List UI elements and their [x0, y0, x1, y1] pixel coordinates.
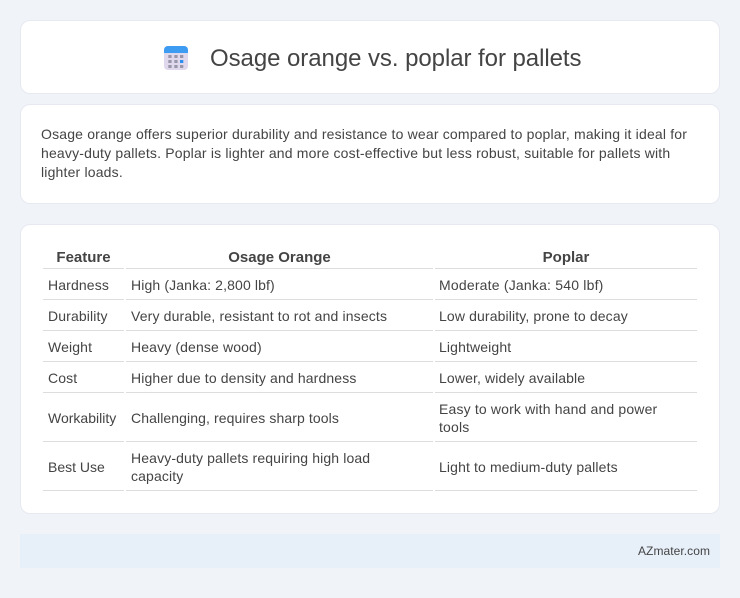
row: best use: capacity [131, 468, 183, 484]
row: cost: Higher due to density and hardness [131, 370, 356, 386]
table header [56, 249, 590, 266]
row: cost: Cost [48, 370, 77, 386]
row: durability: Durability [48, 308, 108, 324]
row: best use [48, 450, 618, 484]
table header: Poplar [543, 249, 589, 266]
summary paragraph: lighter loads. [41, 164, 123, 180]
panel: comparison table [20, 224, 720, 514]
summary paragraph: heavy-duty pallets. Poplar is lighter and more cost-effective but less robust, suitable for pallets with [41, 145, 670, 161]
row: hardness: Hardness [48, 277, 109, 293]
table header: Feature [56, 249, 111, 266]
row: weight [48, 339, 512, 355]
row: weight: Heavy (dense wood) [131, 339, 262, 355]
row: durability: Low durability, prone to decay [439, 308, 628, 324]
table header: Osage Orange [228, 249, 331, 266]
title: Osage orange vs. poplar for pallets [210, 45, 581, 72]
row: workability: Workability [48, 410, 116, 426]
row: hardness: High (Janka: 2,800 lbf) [131, 277, 275, 293]
row: hardness: Moderate (Janka: 540 lbf) [439, 277, 604, 293]
row: cost [48, 370, 585, 386]
row: best use: Light to medium-duty pallets [439, 459, 618, 475]
row: workability: Challenging, requires sharp tools [131, 410, 339, 426]
row: weight: Lightweight [439, 339, 511, 355]
row: durability [48, 308, 628, 324]
row: workability: Easy to work with hand and power [439, 401, 657, 417]
footer credit: AZmater.com [638, 544, 710, 558]
panel: summary text [20, 104, 720, 204]
row: best use: Best Use [48, 459, 105, 475]
row: durability: Very durable, resistant to rot and insects [131, 308, 387, 324]
row: weight: Weight [48, 339, 92, 355]
row: workability [48, 401, 657, 435]
row: best use: Heavy-duty pallets requiring high load [131, 450, 370, 466]
summary paragraph: Osage orange offers superior durability and resistance to wear compared to poplar, making it ideal for [41, 126, 687, 142]
row: cost: Lower, widely available [439, 370, 585, 386]
footer bar [20, 534, 720, 568]
row: workability: tools [439, 419, 469, 435]
row: hardness [48, 277, 604, 293]
icon: calendar [164, 46, 188, 70]
panel: header [20, 20, 720, 94]
summary paragraph [41, 126, 687, 180]
